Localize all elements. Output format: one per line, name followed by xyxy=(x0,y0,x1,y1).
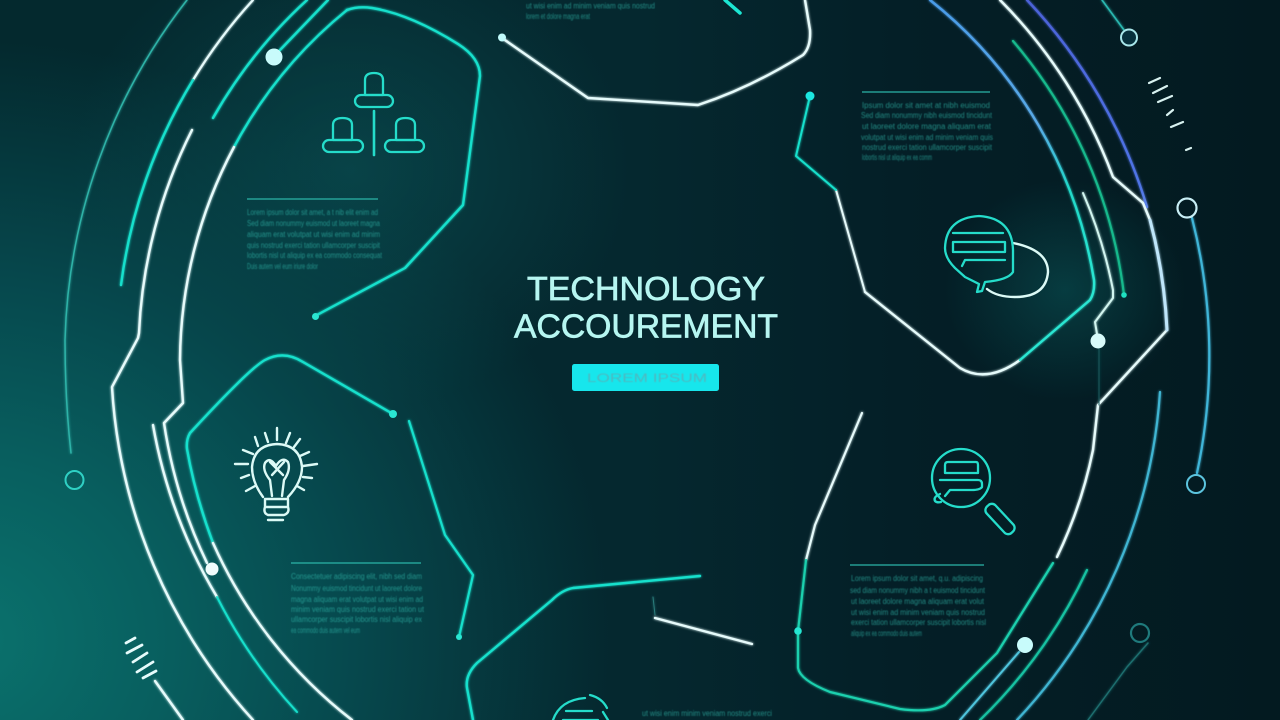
ring marker: bottom right xyxy=(1131,624,1149,642)
dot: green line end xyxy=(1121,292,1127,298)
dot: top panel start xyxy=(498,34,506,42)
text block: bottom panel: ut wisi enim minim veniam nostrud exerci xyxy=(642,709,772,718)
dot: idea panel joint xyxy=(389,410,397,418)
title: TECHNOLOGY xyxy=(527,270,765,307)
text block: chat panel: lobortis nisl ut aliquip ex ea comm xyxy=(862,153,932,162)
text block: idea panel: Nonummy euismod tincidunt ut laoreet dolore xyxy=(291,584,422,593)
panel: top outline xyxy=(502,0,810,105)
icon: magnifier xyxy=(932,449,1017,536)
icon stub: top panel xyxy=(725,0,740,13)
dot: lower right node xyxy=(1017,637,1033,653)
text block: chat panel xyxy=(861,92,993,162)
title xyxy=(514,270,778,344)
text block: search panel: ut wisi enim ad minim veniam quis nostrud xyxy=(851,608,985,617)
text block: people panel: Duis autem vel eum iriure dolor xyxy=(247,262,318,271)
text block: top panel xyxy=(526,2,655,21)
icon: light bulb xyxy=(235,428,317,520)
ring marker: top right xyxy=(1121,30,1137,46)
text block: top panel: ut wisi enim ad minim veniam quis nostrud xyxy=(526,2,655,10)
button: LOREM IPSUM xyxy=(587,371,707,385)
panel: search outline xyxy=(798,413,1053,710)
right ring lines xyxy=(960,0,1209,720)
panel: chat outline xyxy=(796,0,1094,374)
text block: chat panel: ut laoreet dolore magna aliquam erat xyxy=(862,122,992,131)
dot: chat panel start xyxy=(806,92,814,100)
dot: search panel xyxy=(794,627,802,635)
icon: bottom cropped gear xyxy=(553,695,608,720)
dot: idea panel end xyxy=(456,634,462,640)
text block: people panel: aliquam erat volutpat ut wisi enim ad minim xyxy=(247,230,380,239)
icon: people hierarchy xyxy=(323,73,424,155)
tick marks: bottom left xyxy=(126,638,156,678)
panel: bottom outline xyxy=(467,576,700,720)
text block: chat panel: Sed diam nonummy nibh euismod tincidunt xyxy=(861,111,993,120)
text block: idea panel: ea commodo duis autem vel eum xyxy=(291,626,360,635)
icon: chat bubbles xyxy=(945,216,1048,297)
bottom white line xyxy=(653,597,752,644)
text block: idea panel: ullamcorper suscipit lobortis nisl aliquip ex xyxy=(291,615,422,624)
text block: idea panel: magna aliquam erat volutpat ut wisi enim ad xyxy=(291,595,423,604)
text block: people panel: Sed diam nonummy euismod ut laoreet magna xyxy=(247,219,380,228)
dot: upper left node xyxy=(266,48,282,66)
text block: idea panel: Consectetuer adipiscing elit, nibh sed diam xyxy=(291,572,422,581)
text block: search panel: exerci tation ullamcorper suscipit lobortis nisl xyxy=(851,618,986,627)
ring marker: left xyxy=(66,471,84,489)
text block: people panel: quis nostrud exerci tation ullamcorper suscipit xyxy=(247,241,381,250)
left ring lines xyxy=(65,0,347,720)
text block: idea panel: minim veniam quis nostrud exerci tation ut xyxy=(291,605,425,614)
tick marks: top right xyxy=(1149,78,1191,150)
title: ACCOUREMENT xyxy=(514,308,778,344)
dot: people panel end xyxy=(312,313,319,320)
panel: idea outline xyxy=(187,355,473,720)
text block: people panel: Lorem ipsum dolor sit amet, a t nib elit enim ad xyxy=(247,208,378,217)
text block: chat panel: nostrud exerci tation ullamcorper suscipit xyxy=(862,143,993,152)
text block: people panel: lobortis nisl ut aliquip ex ea commodo consequat xyxy=(247,251,383,260)
text block: idea panel xyxy=(291,563,425,635)
text block: search panel: Lorem ipsum dolor sit amet, q.u. adipiscing xyxy=(851,574,983,583)
text block: chat panel: Ipsum dolor sit amet at nibh euismod xyxy=(862,101,990,110)
text block: top panel: lorem et dolore magna erat xyxy=(526,12,591,21)
ring marker: right xyxy=(1178,198,1196,218)
panel: people outline xyxy=(315,7,480,316)
ring marker: lower right xyxy=(1187,475,1205,493)
text block: search panel: ut laoreet dolore magna aliquam erat volut xyxy=(851,597,985,606)
text block: search panel: aliquip ex ea commodo duis autem xyxy=(851,629,922,638)
text block: people panel xyxy=(247,199,383,271)
text block: search panel: sed diam nonummy nibh a t euismod tincidunt xyxy=(850,586,986,595)
dot: lower left node xyxy=(206,562,218,576)
button xyxy=(572,364,719,391)
dot: right node xyxy=(1090,334,1106,348)
text block: search panel xyxy=(850,565,986,638)
text block: chat panel: volutpat ut wisi enim ad minim veniam quis xyxy=(861,133,993,142)
